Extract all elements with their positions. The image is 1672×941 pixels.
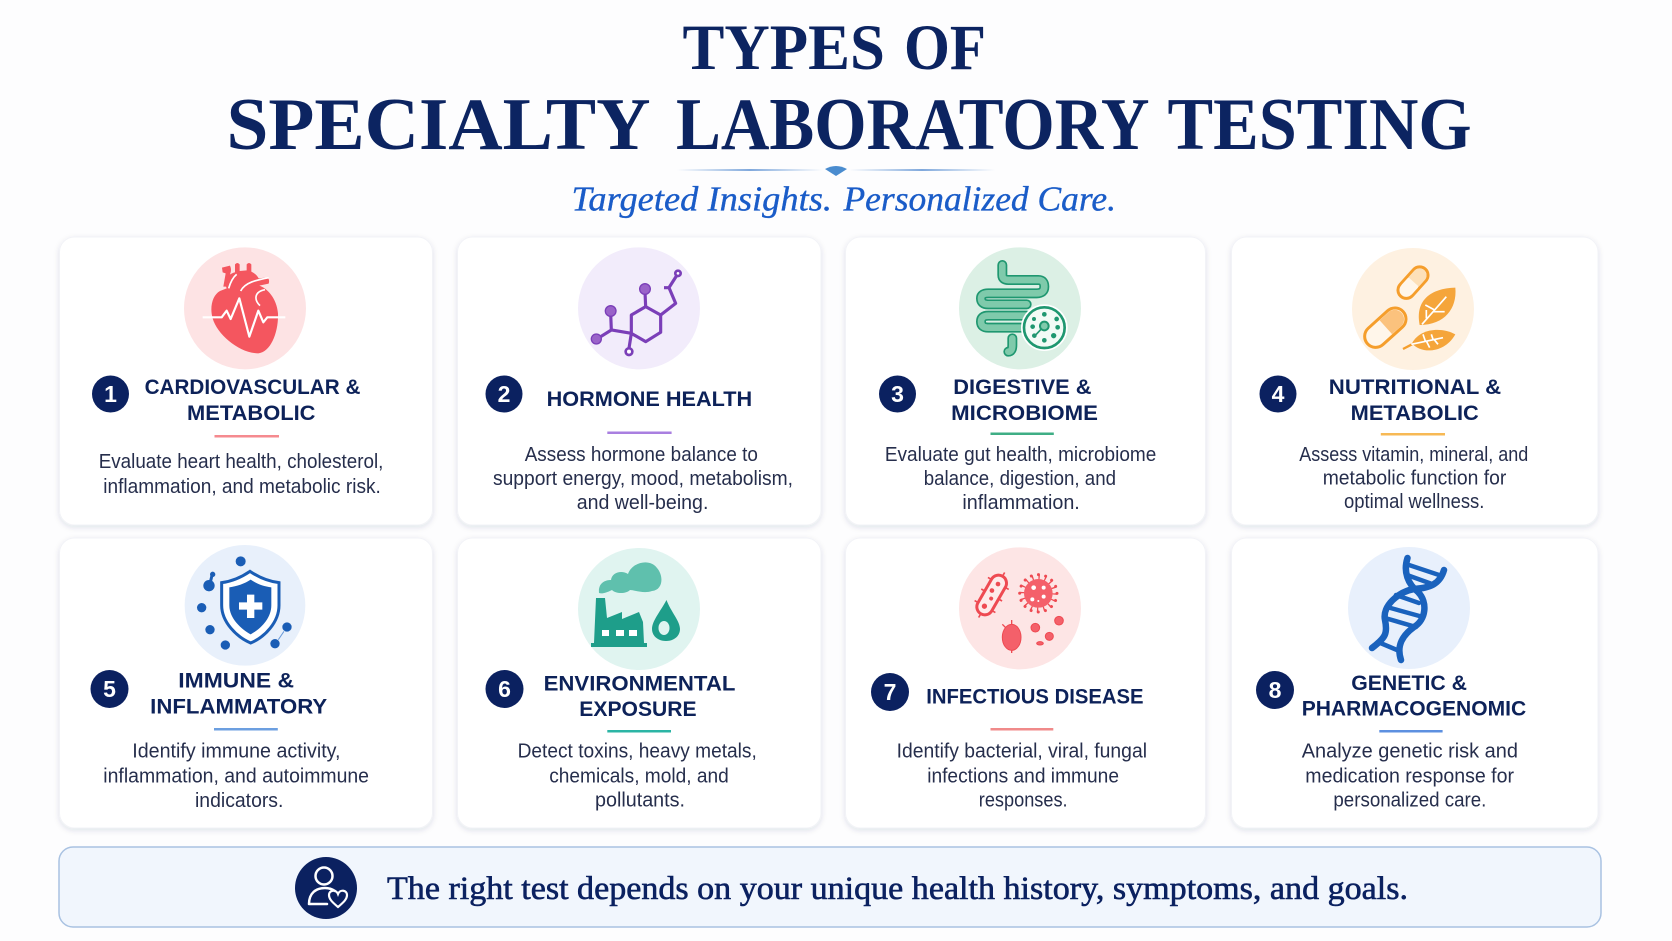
description (493, 444, 793, 514)
number badge 1: 1 (104, 381, 117, 407)
subtitle (572, 180, 1116, 218)
description: Assess vitamin, mineral, and (1299, 444, 1528, 466)
description: pollutants. (595, 790, 685, 812)
icon: shield with cells (185, 545, 305, 666)
heading: METABOLIC (187, 401, 316, 425)
number badge 3: 3 (891, 381, 904, 407)
number badge 2 (486, 376, 522, 412)
title: OF (904, 12, 986, 84)
description: Evaluate heart health, cholesterol, (99, 451, 383, 473)
description: Identify immune activity, (132, 741, 340, 763)
description: Evaluate gut health, microbiome (885, 444, 1156, 466)
heading: GENETIC & (1351, 671, 1467, 695)
heading (1329, 375, 1501, 425)
number badge 8 (1256, 671, 1294, 709)
heading: METABOLIC (1351, 401, 1479, 425)
description: Analyze genetic risk and (1302, 741, 1518, 763)
icon: person with heart (295, 857, 357, 919)
panel: immune and inflammatory (60, 538, 432, 828)
number badge 1 (92, 376, 129, 412)
number badge 6: 6 (498, 676, 511, 702)
description (1299, 444, 1528, 513)
subtitle: Targeted Insights. (572, 180, 832, 218)
callout text: The right test depends on your unique health history, symptoms, and goals. (387, 871, 1408, 907)
heading (544, 672, 735, 721)
number badge 5: 5 (103, 676, 116, 702)
description: Assess hormone balance to (525, 444, 758, 466)
title (226, 12, 1472, 166)
panel: environmental exposure (458, 538, 821, 828)
icon: factory, cloud and droplet (578, 548, 700, 670)
number badge 8: 8 (1269, 677, 1282, 703)
heading (150, 668, 327, 718)
heading (145, 375, 360, 425)
title: SPECIALTY (226, 84, 650, 166)
description: Identify bacterial, viral, fungal (897, 741, 1147, 763)
icon: pathogens (959, 547, 1081, 669)
heading: PHARMACOGENOMIC (1302, 697, 1526, 721)
title: TESTING (1168, 84, 1472, 166)
description: personalized care. (1333, 790, 1486, 812)
description: metabolic function for (1323, 468, 1507, 490)
description: inflammation, and autoimmune (103, 766, 369, 788)
heading: IMMUNE & (178, 668, 294, 692)
number badge 5 (90, 670, 128, 708)
description: indicators. (195, 790, 283, 812)
description (103, 741, 369, 812)
title divider (677, 166, 995, 176)
icon: capsules and leaves (1352, 248, 1474, 370)
callout banner (59, 847, 1601, 927)
description (897, 741, 1147, 812)
panel: hormone health (458, 237, 821, 525)
panel: genetic and pharmacogenomic (1232, 538, 1598, 828)
description (885, 444, 1156, 514)
heading: INFECTIOUS DISEASE (926, 684, 1144, 708)
icon: intestine and microbe (959, 247, 1081, 369)
heading: NUTRITIONAL & (1329, 375, 1501, 399)
panel: digestive and microbiome (846, 237, 1206, 525)
icon: DNA helix (1348, 547, 1470, 669)
description (518, 741, 757, 812)
description: Detect toxins, heavy metals, (518, 741, 757, 763)
heading: ENVIRONMENTAL (544, 672, 735, 696)
heading: MICROBIOME (951, 401, 1098, 425)
title: TYPES (682, 12, 885, 84)
icon: heart (184, 247, 306, 369)
heading: CARDIOVASCULAR & (145, 375, 360, 399)
description: and well-being. (577, 492, 708, 514)
title: LABORATORY (676, 84, 1150, 166)
number badge 6 (486, 670, 524, 708)
description (99, 451, 383, 498)
number badge 3 (879, 376, 916, 412)
description: chemicals, mold, and (549, 765, 729, 787)
number badge 4 (1260, 376, 1296, 412)
description: support energy, mood, metabolism, (493, 468, 793, 490)
panel: cardiovascular and metabolic (60, 237, 432, 525)
description: balance, digestion, and (924, 468, 1116, 490)
heading (951, 375, 1098, 425)
description: responses. (979, 790, 1068, 812)
panel: nutritional and metabolic (1232, 237, 1598, 525)
panel: infectious disease (846, 538, 1206, 828)
number badge 7 (871, 673, 909, 711)
subtitle: Personalized Care. (842, 180, 1116, 218)
icon: molecule (578, 247, 700, 369)
heading: EXPOSURE (579, 697, 697, 721)
heading: HORMONE HEALTH (547, 387, 752, 411)
heading: DIGESTIVE & (953, 375, 1092, 399)
description: optimal wellness. (1344, 491, 1484, 513)
number badge 7: 7 (884, 679, 896, 705)
description: inflammation, and metabolic risk. (103, 476, 381, 498)
description: medication response for (1305, 765, 1514, 787)
description (1302, 741, 1518, 812)
description: inflammation. (962, 492, 1080, 514)
number badge 2: 2 (498, 381, 510, 407)
description: infections and immune (927, 765, 1119, 787)
number badge 4: 4 (1272, 381, 1285, 407)
heading: INFLAMMATORY (150, 694, 327, 718)
heading (1302, 671, 1526, 721)
